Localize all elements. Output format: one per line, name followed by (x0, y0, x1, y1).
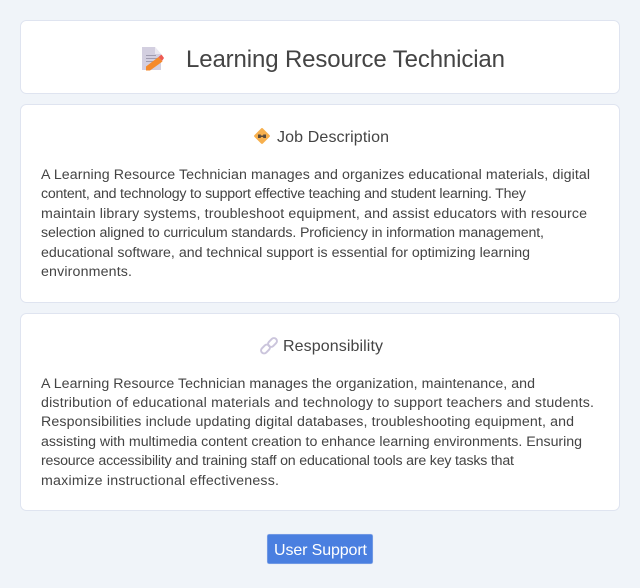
button: user support: User Support (274, 542, 368, 559)
button: user support (267, 534, 373, 564)
heading: page title: Learning Resource Technician (186, 46, 505, 73)
text block: job description: environments. (41, 264, 132, 280)
icon: chain link (260, 337, 278, 355)
icon: orange diamond (254, 128, 270, 144)
panel: job description (20, 104, 620, 302)
text block: job description (41, 167, 590, 280)
text block: responsibility: A Learning Resource Technician manages the organization, maintenance, and (41, 376, 535, 392)
heading: responsibility: Responsibility (283, 338, 383, 355)
panel: responsibility (20, 314, 620, 510)
text block: job description: maintain library systems, troubleshoot equipment, and assist educators with resource (41, 206, 587, 222)
icon: document with pencil (142, 47, 164, 70)
text block: job description: educational software, and technical support is essential for optimizing learning (41, 245, 530, 261)
text block: job description: selection aligned to curriculum standards. Proficiency in information management, (41, 225, 544, 241)
text block: responsibility: maximize instructional effectiveness. (41, 473, 279, 489)
panel: title (20, 20, 620, 94)
text block: job description: content, and technology to support effective teaching and student learning. They (41, 186, 527, 202)
text block: responsibility: resource accessibility and training staff on educational tools are key tasks that (41, 453, 514, 469)
text block: responsibility: assisting with multimedia content creation to enhance learning environments. Ensuring (41, 434, 582, 450)
heading: job description: Job Description (277, 129, 389, 146)
text block: responsibility (41, 376, 594, 489)
text block: responsibility: distribution of educational materials and technology to support teachers and students. (41, 395, 594, 411)
text block: responsibility: Responsibilities include updating digital databases, troubleshooting equipment, and (41, 414, 574, 430)
text block: job description: A Learning Resource Technician manages and organizes educational materials, digital (41, 167, 590, 183)
